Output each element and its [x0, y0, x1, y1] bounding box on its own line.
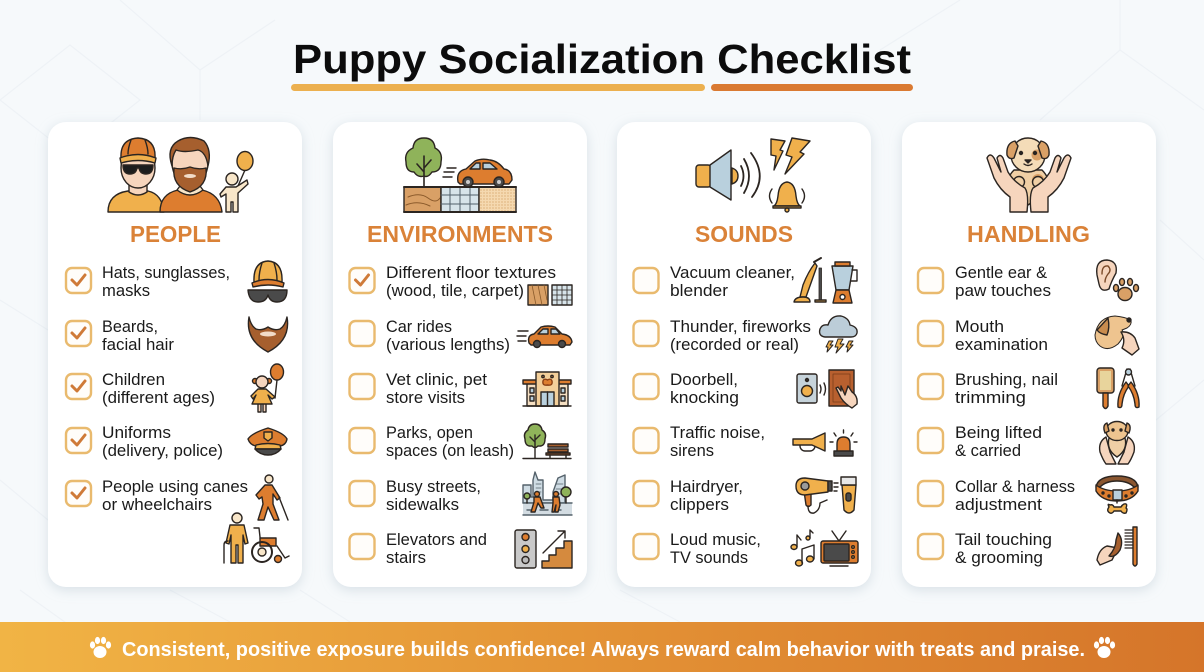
label	[955, 531, 1052, 567]
item: hats	[66, 261, 287, 302]
label: Busy streets,	[386, 478, 481, 496]
icon: trumpet	[793, 433, 825, 451]
label: (various lengths)	[386, 336, 510, 354]
banner bar	[0, 622, 1204, 672]
icon: hairdryer	[796, 478, 838, 513]
item: tail	[918, 527, 1137, 567]
label: store visits	[386, 389, 465, 407]
item: mouth	[918, 316, 1139, 355]
item: parks	[350, 424, 571, 460]
icon: hand on tail	[1097, 533, 1122, 565]
checkbox	[66, 268, 91, 293]
title: Puppy Socialization Checklist	[293, 36, 911, 82]
icon: sounds hero	[696, 138, 810, 212]
checkbox	[350, 428, 374, 453]
icon: clippers	[841, 477, 856, 513]
label	[670, 318, 811, 354]
label: People using canes	[102, 478, 248, 496]
item: uniforms	[66, 424, 287, 460]
icon: ear	[1097, 260, 1116, 290]
icon: left paw	[90, 637, 111, 658]
label	[102, 371, 215, 407]
label: Brushing, nail	[955, 371, 1058, 389]
icon: elevator panel	[515, 530, 536, 568]
icon: storm cloud	[820, 316, 857, 353]
checkbox	[350, 321, 374, 346]
checkbox	[634, 534, 658, 559]
label	[955, 371, 1058, 407]
label: Elevators and	[386, 531, 487, 549]
label	[102, 264, 230, 300]
checkbox	[66, 481, 91, 506]
icon: music notes	[791, 530, 814, 566]
label	[955, 318, 1048, 354]
heading: environments: ENVIRONMENTS	[367, 221, 553, 247]
item: hairdryer	[634, 477, 856, 514]
item: ear and paw	[918, 260, 1138, 300]
checkbox	[634, 428, 658, 453]
icon: nail clippers	[1118, 369, 1139, 408]
banner message: Consistent, positive exposure builds confidence! Always reward calm behavior with treats and praise.	[122, 639, 1085, 661]
icon: doorbell	[797, 374, 826, 403]
icon: walker with cane	[256, 475, 288, 520]
item: elevators	[350, 530, 572, 568]
panel: sounds	[617, 122, 871, 587]
icon: vet clinic	[523, 372, 571, 406]
label	[670, 371, 739, 407]
label: masks	[102, 282, 150, 300]
icon: comb	[1125, 527, 1137, 566]
item: canes	[66, 475, 289, 563]
icon: vacuum cleaner	[794, 258, 826, 302]
label: Parks, open	[386, 424, 473, 442]
label: & grooming	[955, 549, 1043, 567]
label	[670, 478, 743, 514]
label: facial hair	[102, 336, 175, 354]
heading: sounds: SOUNDS	[695, 221, 793, 247]
label: (wood, tile, carpet)	[386, 282, 524, 300]
item: brushing	[918, 368, 1139, 408]
label: Uniforms	[102, 424, 171, 442]
label: Mouth	[955, 318, 1004, 336]
checkbox	[918, 428, 943, 453]
label: TV sounds	[670, 549, 748, 567]
title underline	[291, 84, 913, 91]
checkbox	[66, 374, 91, 399]
icon: door with knocking hand	[829, 370, 857, 408]
sounds card	[617, 122, 871, 587]
label: paw touches	[955, 282, 1051, 300]
label	[955, 478, 1075, 514]
label: trimming	[955, 389, 1026, 407]
label: clippers	[670, 496, 729, 514]
item: busy streets	[350, 472, 572, 515]
label: (recorded or real)	[670, 336, 799, 354]
icon: wood and tile swatches	[528, 285, 572, 305]
checkbox	[350, 268, 374, 293]
label: Thunder, fireworks	[670, 318, 811, 336]
label: adjustment	[955, 496, 1042, 514]
panel: environments	[333, 122, 587, 587]
label: Loud music,	[670, 531, 761, 549]
label: Car rides	[386, 318, 452, 336]
icon: police hat	[248, 428, 287, 455]
label: examination	[955, 336, 1048, 354]
label: Doorbell,	[670, 371, 738, 389]
icon: tree and bench	[523, 424, 571, 458]
checkbox	[918, 268, 943, 293]
item: beards	[66, 317, 288, 354]
label: blender	[670, 282, 729, 300]
label	[386, 424, 514, 460]
item: traffic	[634, 424, 857, 460]
icon: city street	[523, 472, 572, 515]
label: Traffic noise,	[670, 424, 765, 442]
icon: stairs with arrow	[542, 531, 572, 568]
icon: cap and sunglasses	[248, 261, 287, 302]
item: vacuum	[634, 258, 857, 303]
checkbox	[918, 534, 943, 559]
checkbox	[634, 481, 658, 506]
label	[670, 424, 765, 460]
item: children	[66, 364, 284, 412]
label	[102, 318, 175, 354]
label: or wheelchairs	[102, 496, 212, 514]
label: knocking	[670, 389, 739, 407]
label: (different ages)	[102, 389, 215, 407]
label	[955, 264, 1051, 300]
checkbox	[918, 374, 943, 399]
label: Being lifted	[955, 424, 1042, 442]
label	[386, 371, 487, 407]
item: floors	[350, 264, 572, 305]
icon: puppy being lifted	[1100, 422, 1134, 464]
item: collar	[918, 476, 1138, 514]
label: & carried	[955, 442, 1021, 460]
checkbox	[350, 481, 374, 506]
label: stairs	[386, 549, 426, 567]
icon: environments hero	[404, 138, 516, 212]
label: Collar & harness	[955, 478, 1075, 496]
handling card	[902, 122, 1156, 587]
icon: brush	[1097, 368, 1114, 408]
item: loud music	[634, 530, 858, 567]
icon: elderly man and wheelchair	[224, 513, 289, 563]
label	[386, 264, 556, 300]
label: Different floor textures	[386, 264, 556, 282]
label: spaces (on leash)	[386, 442, 514, 460]
icon: collar with bone tag	[1096, 476, 1138, 513]
heading: people: PEOPLE	[130, 221, 221, 247]
icon: television	[821, 531, 858, 566]
icon: siren	[830, 430, 857, 456]
checkbox	[634, 321, 658, 346]
icon: beard	[248, 317, 288, 352]
checkbox	[350, 374, 374, 399]
icon: blender	[832, 262, 857, 303]
label: (delivery, police)	[102, 442, 223, 460]
label: Vacuum cleaner,	[670, 264, 795, 282]
label	[102, 424, 223, 460]
item: car rides	[350, 318, 572, 354]
checkbox	[66, 321, 91, 346]
label	[386, 531, 487, 567]
label	[670, 531, 761, 567]
item: thunder	[634, 316, 857, 354]
checkbox	[66, 428, 91, 453]
icon: handling hero	[987, 138, 1071, 212]
label	[670, 264, 795, 300]
icon: paw print	[1114, 278, 1138, 300]
icon: child with balloon	[251, 364, 284, 412]
checkbox	[350, 534, 374, 559]
footer banner	[0, 622, 1204, 672]
panel: handling	[902, 122, 1156, 587]
label: Vet clinic, pet	[386, 371, 487, 389]
people card	[48, 122, 302, 587]
icon: dog mouth examination	[1095, 316, 1139, 355]
label: Hairdryer,	[670, 478, 743, 496]
label: Hats, sunglasses,	[102, 264, 230, 282]
label: sidewalks	[386, 496, 459, 514]
icon: car	[517, 326, 572, 348]
heading: handling: HANDLING	[967, 221, 1090, 247]
checkbox	[918, 481, 943, 506]
label	[386, 478, 481, 514]
checkbox	[634, 268, 658, 293]
label: sirens	[670, 442, 714, 460]
item: lifted	[918, 422, 1134, 464]
label	[102, 478, 248, 514]
environments card	[333, 122, 587, 587]
item: doorbell	[634, 370, 857, 408]
label: Gentle ear &	[955, 264, 1047, 282]
label: Tail touching	[955, 531, 1052, 549]
label	[386, 318, 510, 354]
label	[955, 424, 1042, 460]
label: Beards,	[102, 318, 158, 336]
item: vet clinic	[350, 371, 571, 407]
icon: right paw	[1094, 637, 1115, 658]
label: Children	[102, 371, 165, 389]
checkbox	[918, 321, 943, 346]
checkbox	[634, 374, 658, 399]
icon: people hero	[108, 138, 253, 212]
